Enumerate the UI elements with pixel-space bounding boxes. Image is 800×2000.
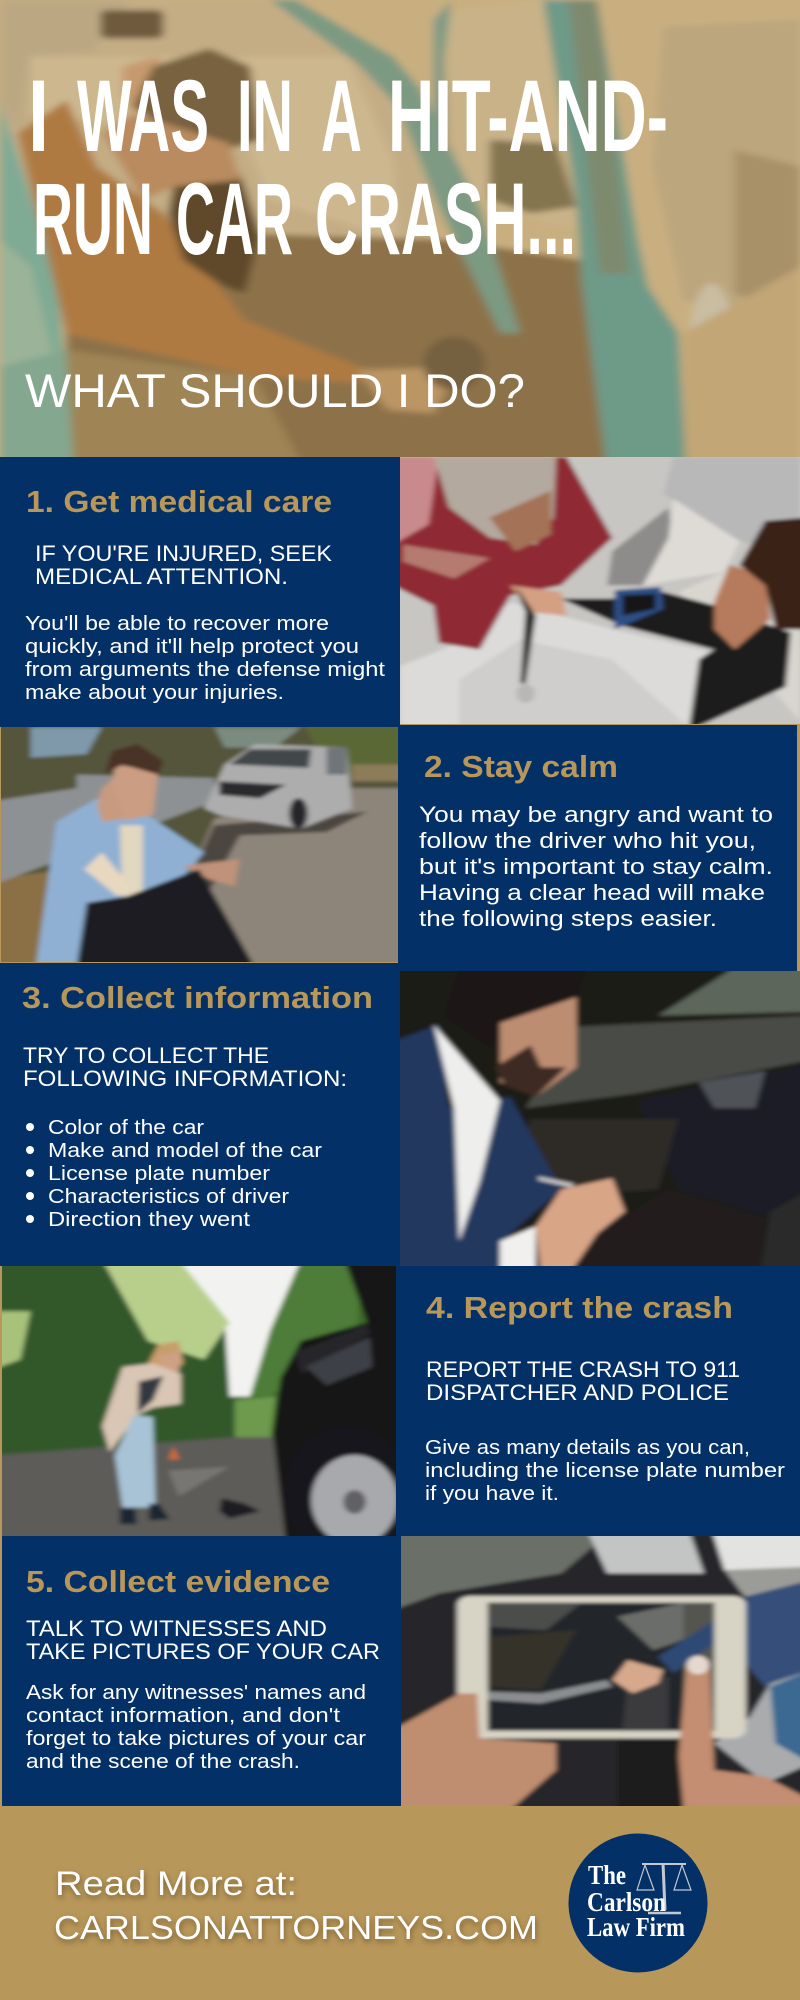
panel 5 body text: Ask for any witnesses' names and [26,1681,366,1704]
panel 1 body text: from arguments the defense might [25,658,385,681]
panel 2 body text: Having a clear head will make [419,880,765,905]
panel 5 body text: and the scene of the crash. [26,1750,300,1773]
panel 2 body text [419,802,773,931]
panel 1 subheading: IF YOU'RE INJURED, SEEK [35,541,332,566]
panel 2 body text: the following steps easier. [419,906,717,931]
panel 3 heading: 3. Collect information [22,980,373,1015]
panel 2: stay calm [398,725,797,971]
panel 4 body text: including the license plate number [425,1459,785,1482]
panel 3 subheading [23,1043,347,1091]
photo: man on phone by crashed car [0,720,408,971]
panel 3 bullet list: Color of the car [48,1116,204,1139]
panel 2 body text: follow the driver who hit you, [419,828,756,853]
hero title: I [28,59,49,173]
panel 3 bullet list: Direction they went [48,1208,250,1231]
panel 3 bullet list: Characteristics of driver [48,1185,289,1208]
logo wordmark: Carlson [587,1887,666,1917]
logo wordmark [587,1860,685,1942]
panel 1 body text [25,612,385,704]
icon: scales of justice [637,1863,691,1913]
panel 2 heading: 2. Stay calm [424,749,618,784]
footer band [0,1806,800,2000]
panel 1 subheading: MEDICAL ATTENTION. [35,564,288,589]
panel 4: report the crash [396,1266,800,1537]
logo: The Carlson Law Firm [568,1834,708,1972]
panel 4 subheading: DISPATCHER AND POLICE [426,1380,729,1405]
hero title: CRASH... [315,162,576,276]
panel 1 body text: quickly, and it'll help protect you [25,635,359,658]
panel 1 body text: make about your injuries. [25,681,284,704]
panel 3: collect information [0,963,400,1266]
hero title [28,59,668,276]
panel 5 subheading: TALK TO WITNESSES AND [26,1616,327,1641]
hero subtitle: WHAT SHOULD I DO? [25,364,525,417]
panel 5 subheading [26,1616,380,1664]
panel 5 subheading: TAKE PICTURES OF YOUR CAR [26,1639,380,1664]
photo: hands photographing car damage with tablet [388,1530,800,1810]
panel 3 bullet list [26,1116,322,1231]
panel 3 bullet list: License plate number [48,1162,270,1185]
panel 3 subheading: FOLLOWING INFORMATION: [23,1066,347,1091]
photo: woman on phone by damaged car on wet road [2,1266,396,1536]
panel 4 heading: 4. Report the crash [426,1290,733,1325]
photo: paramedic checking patient [388,450,800,734]
panel 1 subheading [35,541,332,589]
panel 5 body text [26,1681,366,1773]
hero title: RUN [33,162,153,276]
hero title: CAR [176,162,293,276]
panel 5: collect evidence [2,1536,401,1806]
logo wordmark: Law Firm [587,1912,685,1942]
panel 4 subheading: REPORT THE CRASH TO 911 [426,1357,740,1382]
panel 2 body text: You may be angry and want to [419,802,773,827]
panel 4 body text: if you have it. [425,1482,559,1505]
panel 1 body text: You'll be able to recover more [25,612,329,635]
panel 3 bullet list: Make and model of the car [48,1139,322,1162]
panel 2 body text: but it's important to stay calm. [419,854,773,879]
hero title: A [321,59,362,173]
logo wordmark: The [588,1860,626,1890]
panel 3 subheading: TRY TO COLLECT THE [23,1043,269,1068]
panel 5 body text: forget to take pictures of your car [26,1727,366,1750]
panel 5 body text: contact information, and don't [26,1704,340,1727]
footer call to action [54,1865,538,1946]
panel 5 heading: 5. Collect evidence [26,1564,330,1599]
footer call to action: Read More at: [55,1865,297,1903]
panel 4 body text: Give as many details as you can, [425,1436,750,1459]
hero title: WAS [77,59,209,173]
hero title: IN [237,59,293,173]
panel 4 body text [425,1436,785,1505]
footer call to action: CARLSONATTORNEYS.COM [54,1909,538,1946]
panel 1: get medical care [0,457,400,727]
panel 1 heading: 1. Get medical care [26,484,332,519]
panel 4 subheading [426,1357,740,1405]
photo: man writing on clipboard beside damaged car [388,964,800,1274]
hero photo: woman leaning out of car [0,0,800,480]
